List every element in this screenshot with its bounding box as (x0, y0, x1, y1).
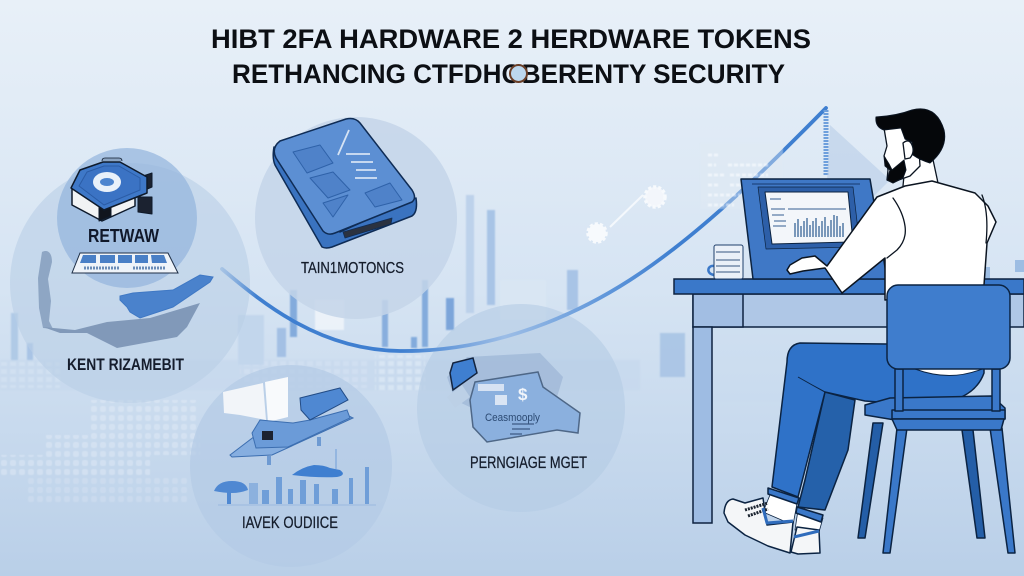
neck (903, 155, 938, 190)
panel: desk (674, 279, 1024, 523)
label: KENT RIZAME BIT: KENT RIZAMEBIT (67, 355, 185, 374)
panel: legs and chair (724, 285, 1015, 554)
shoes (724, 498, 793, 553)
icon: network nodes (588, 187, 665, 242)
icon: payment card and glove (447, 353, 580, 442)
panel: tablet circle (255, 117, 457, 319)
faint data panel (700, 143, 783, 209)
faint desk objects (985, 260, 1024, 279)
label: PERNGIAGE MGET: PERNGIAGE MGET (470, 454, 587, 472)
title: HIBT 2FA HARDWARE 2 HERDWARE TOKENS (211, 24, 811, 54)
label: TAIN MOTONCS: TAIN1MOTONCS (301, 260, 404, 277)
background dot field (0, 400, 200, 505)
icon: payment card and glove: Ceasmooply (485, 412, 540, 424)
socks (763, 490, 798, 525)
shirt and arm (787, 181, 996, 300)
panel: bottom right circle (417, 304, 625, 512)
panel: person (787, 109, 996, 300)
panel: bottom left circle (190, 365, 392, 567)
faint triangle behind monitor (826, 125, 890, 200)
icon: tablet device (273, 118, 416, 248)
chair back (887, 285, 1010, 369)
cuffs (768, 488, 799, 504)
icon: payment card and glove: $ (518, 385, 528, 404)
icon: mug (708, 245, 743, 279)
icon: hardware token hexagon (71, 158, 152, 221)
thigh and hip (772, 340, 984, 497)
back leg (798, 392, 855, 510)
title (211, 24, 811, 89)
label: RETWAW: RETWAW (88, 225, 159, 246)
icon: data strip (72, 253, 178, 273)
hair (876, 109, 945, 163)
trend curve (222, 108, 826, 351)
icon: blue hand and shadow (38, 251, 213, 348)
chair back posts (895, 369, 1000, 411)
front chair legs (883, 428, 907, 553)
rear chair legs (858, 423, 883, 538)
panel: left circles (10, 148, 250, 403)
background city skyline (0, 195, 1024, 402)
icon: monitor (741, 179, 887, 279)
title: RETHANCING CTFDHOBERENTY SECURITY (232, 59, 785, 89)
ear (903, 141, 913, 159)
monitor bar chart (795, 215, 843, 237)
icon: mini skyline (214, 449, 376, 505)
shirt hem (915, 369, 982, 376)
head (884, 126, 920, 182)
label: IAVEK OUDIICE: IAVEK OUDIICE (242, 514, 338, 532)
title glyph ring (510, 65, 527, 82)
chair seat (865, 396, 1005, 420)
beard (884, 156, 906, 183)
icon: book and machine (223, 377, 353, 465)
